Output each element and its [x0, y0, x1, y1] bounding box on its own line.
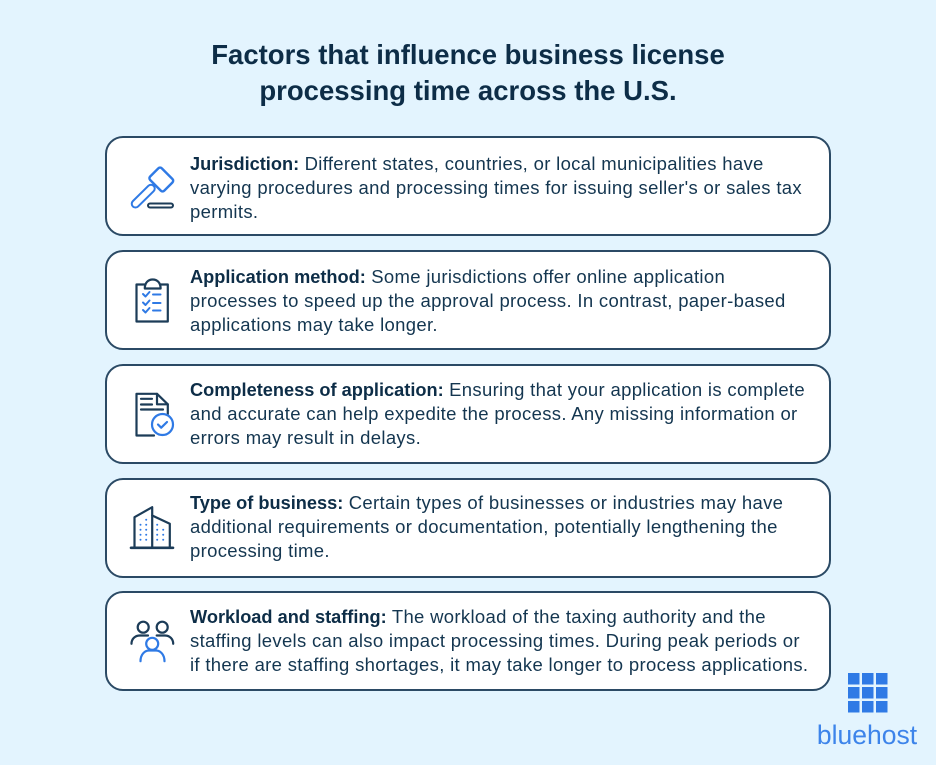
text: jurisdiction: Jurisdiction: Different states, countries, or local municipalities have [190, 153, 764, 174]
text: application method: processes to speed up the approval process. In contrast, paper-based [190, 290, 786, 311]
title: processing time across the U.S. [259, 74, 677, 106]
text: type of business: Type of business: Certain types of businesses or industries may have [190, 492, 783, 513]
text: jurisdiction [190, 153, 802, 222]
text: application method: applications may take longer. [190, 314, 438, 335]
text: application method [190, 266, 786, 335]
text: type of business: processing time. [190, 540, 330, 561]
text: jurisdiction: varying procedures and processing times for issuing seller's or sales tax [190, 177, 802, 198]
icon: clipboard checklist [135, 278, 169, 323]
text: workload and staffing: if there are staffing shortages, it may take longer to process applications. [190, 654, 808, 675]
panel: jurisdiction [105, 136, 831, 236]
text: completeness: Completeness of application: Ensuring that your application is complete [190, 379, 805, 400]
logo: bluehost wordmark: bluehost [817, 720, 917, 750]
text: workload and staffing: Workload and staffing: The workload of the taxing authority and the [190, 606, 766, 627]
icon: people [130, 620, 174, 662]
title [211, 38, 725, 106]
icon: document with check [135, 392, 174, 437]
title: Factors that influence business license [211, 38, 725, 70]
text: completeness: and accurate can help expedite the process. Any missing information or [190, 403, 798, 424]
logo: bluehost grid [848, 673, 888, 712]
text: workload and staffing: staffing levels can also impact processing times. During peak periods or [190, 630, 800, 651]
text: application method: Application method: Some jurisdictions offer online application [190, 266, 725, 287]
text: type of business [190, 492, 783, 561]
panel: type of business [105, 478, 831, 578]
icon: gavel [130, 166, 174, 208]
text: jurisdiction: permits. [190, 201, 258, 222]
panel: application method [105, 250, 831, 350]
panel: completeness [105, 364, 831, 464]
text: type of business: additional requirements or documentation, potentially lengthening the [190, 516, 778, 537]
text: completeness [190, 379, 805, 448]
text: workload and staffing [190, 606, 808, 675]
text: completeness: errors may result in delays. [190, 427, 421, 448]
panel: workload and staffing [105, 591, 831, 691]
icon: buildings [130, 506, 174, 550]
